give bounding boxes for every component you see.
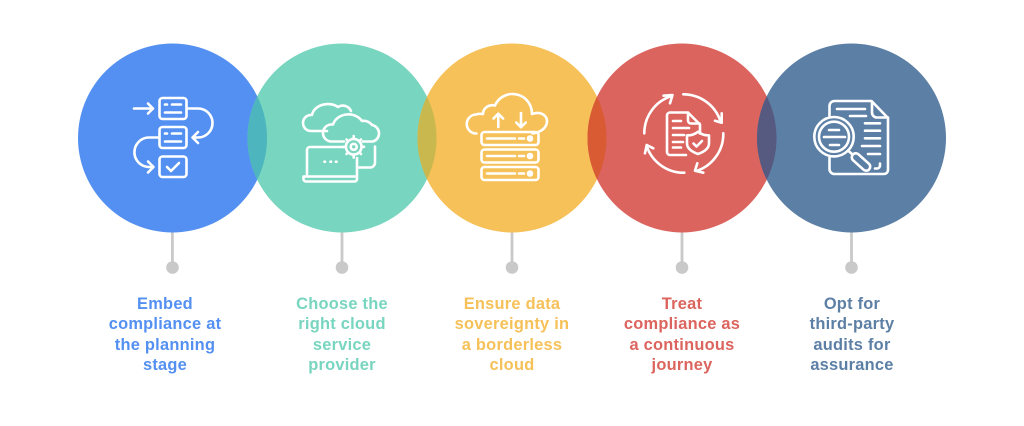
label: step 5: third-party bbox=[810, 315, 894, 333]
label: step 3: sovereignty in bbox=[455, 315, 569, 333]
circle: step 3 yellow bbox=[418, 44, 606, 232]
connector: step 4 bbox=[676, 232, 688, 274]
label: step 3: a borderless bbox=[462, 336, 562, 354]
circle: step 4 red bbox=[588, 44, 776, 232]
label: step 5: audits for bbox=[813, 336, 891, 354]
icon: workflow checklist bbox=[134, 98, 212, 177]
overlap: teal and yellow bbox=[418, 97, 436, 179]
circle: step 1 blue bbox=[78, 44, 267, 232]
connector: step 5 bbox=[845, 232, 858, 274]
icon: compliance document cycle bbox=[644, 94, 723, 173]
label: step 4 bbox=[624, 295, 740, 374]
label: step 5: assurance bbox=[810, 356, 894, 374]
icon: clouds, gear and laptop bbox=[303, 104, 379, 182]
connector: step 2 bbox=[336, 232, 348, 274]
circle: step 2 teal bbox=[248, 44, 436, 232]
label: step 4: journey bbox=[652, 356, 712, 374]
label: step 4: Treat bbox=[662, 295, 702, 313]
icon: cloud and server stack bbox=[467, 94, 547, 180]
label: step 2: right cloud bbox=[298, 315, 386, 333]
label: step 1: Embed bbox=[137, 295, 193, 313]
label: step 2 bbox=[296, 295, 388, 374]
overlap: blue and teal bbox=[248, 96, 267, 180]
label: step 5 bbox=[810, 295, 894, 374]
overlap: yellow and red bbox=[588, 97, 606, 179]
connector: step 1 bbox=[166, 232, 179, 274]
label: step 3 bbox=[455, 295, 569, 374]
label: step 1 bbox=[109, 295, 221, 374]
label: step 4: compliance as bbox=[624, 315, 740, 333]
connector: step 3 bbox=[506, 232, 518, 274]
label: step 4: a continuous bbox=[630, 336, 734, 354]
label: step 1: the planning bbox=[115, 336, 215, 354]
label: step 1: stage bbox=[143, 356, 187, 374]
label: step 2: provider bbox=[308, 356, 376, 374]
label: step 1: compliance at bbox=[109, 315, 221, 333]
label: step 2: service bbox=[313, 336, 371, 354]
icon: magnifier over document bbox=[814, 101, 888, 174]
circle: step 5 navy bbox=[757, 44, 946, 232]
label: step 2: Choose the bbox=[296, 295, 388, 313]
overlap: red and navy bbox=[757, 96, 776, 180]
label: step 5: Opt for bbox=[824, 295, 880, 313]
label: step 3: cloud bbox=[490, 356, 534, 374]
label: step 3: Ensure data bbox=[464, 295, 560, 313]
